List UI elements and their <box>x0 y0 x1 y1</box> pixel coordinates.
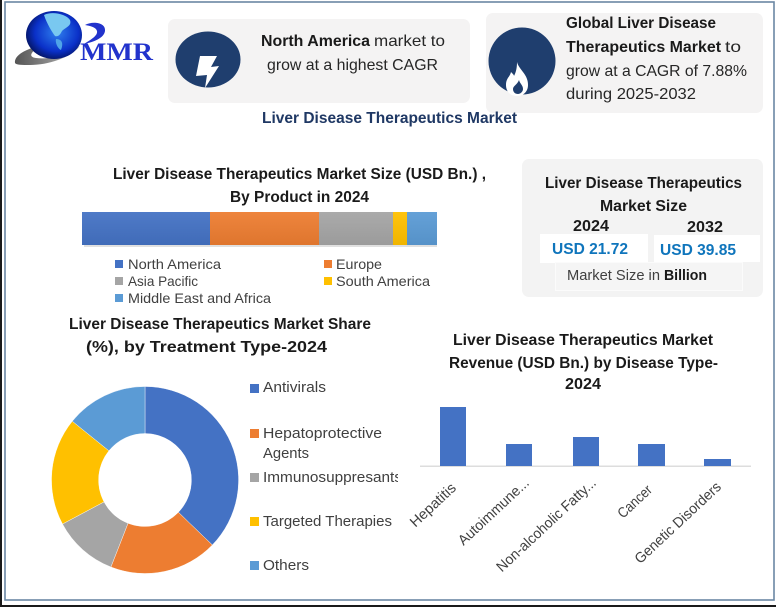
market size heading: Market Size <box>600 198 687 215</box>
icon: flame <box>488 28 556 96</box>
heading: revenue by disease type: 2024 <box>565 376 601 393</box>
callout text: global CAGR <box>566 15 747 103</box>
callout text: North America: grow at a highest CAGR <box>267 57 438 74</box>
stacked bar chart <box>82 212 437 247</box>
market size unit note: Billion <box>664 267 707 284</box>
donut legend <box>250 380 402 574</box>
heading: market size by product: By Product in 2024 <box>230 189 369 206</box>
year labels: 2032 <box>687 219 723 236</box>
donut legend: Hepatoprotective <box>263 426 382 442</box>
bar legend: North America <box>128 256 221 272</box>
bar legend: Europe <box>336 256 382 272</box>
callout text: North America: North America <box>261 33 370 50</box>
year labels: 2024 <box>573 218 609 235</box>
logo: MMR globe <box>15 11 154 66</box>
heading: revenue by disease type <box>449 332 718 393</box>
callout text: global CAGR: during 2025-2032 <box>566 86 696 103</box>
callout text: North America <box>261 33 445 74</box>
column chart axis labels: Genetic Disorders <box>632 479 725 567</box>
heading: market size by product: Liver Disease Therapeutics Market Size (USD Bn.) , <box>113 166 486 183</box>
icon: lightning bolt <box>176 32 240 88</box>
donut legend: Agents <box>263 446 309 462</box>
value: 2024: USD 21.72 <box>552 241 628 258</box>
heading: share by treatment type: Liver Disease Therapeutics Market Share <box>69 316 371 333</box>
panel: market size <box>522 159 763 297</box>
donut legend: Targeted Therapies <box>263 514 392 530</box>
heading: share by treatment type: (%), by Treatment Type-2024 <box>86 339 327 356</box>
panel: North America callout <box>168 19 470 103</box>
value: 2032 <box>654 235 760 262</box>
column chart <box>420 407 751 467</box>
column chart axis labels: Hepatitis <box>407 480 460 531</box>
market size heading <box>545 175 742 215</box>
column chart axis labels: Cancer <box>615 482 656 522</box>
main title: Liver Disease Therapeutics Market <box>262 110 518 127</box>
donut legend: Immunosuppresants <box>263 470 402 486</box>
callout text: global CAGR: grow at a CAGR of 7.88% <box>566 63 747 80</box>
heading: revenue by disease type: Revenue (USD Bn.) by Disease Type- <box>449 355 718 372</box>
callout text: global CAGR: Global Liver Disease <box>566 15 716 32</box>
column chart axis labels: Autoimmune... <box>455 475 533 549</box>
panel: Global CAGR callout <box>486 13 763 113</box>
year labels <box>573 218 723 236</box>
callout text: North America: market to <box>374 33 445 50</box>
donut legend: Antivirals <box>263 380 326 396</box>
bar legend: Asia Pacific <box>128 273 198 289</box>
logo: MMR globe: MMR <box>80 39 154 66</box>
donut chart <box>51 386 239 573</box>
market size unit note <box>556 262 742 290</box>
heading: revenue by disease type: Liver Disease Therapeutics Market <box>453 332 714 349</box>
value: 2024 <box>540 234 648 263</box>
bar legend <box>115 256 430 306</box>
column chart axis labels: Non-alcoholic Fatty... <box>494 475 600 576</box>
market size heading: Liver Disease Therapeutics <box>545 175 742 192</box>
callout text: global CAGR: to <box>725 39 741 56</box>
bar legend: South America <box>336 273 430 289</box>
value: 2032: USD 39.85 <box>660 242 736 259</box>
market size unit note: Market Size in <box>567 267 660 284</box>
callout text: global CAGR: Therapeutics Market <box>566 39 722 56</box>
bar legend: Middle East and Africa <box>128 290 271 306</box>
heading: market size by product <box>113 166 486 206</box>
donut legend: Others <box>263 558 309 574</box>
column chart axis labels <box>407 475 725 576</box>
heading: share by treatment type <box>69 316 371 356</box>
